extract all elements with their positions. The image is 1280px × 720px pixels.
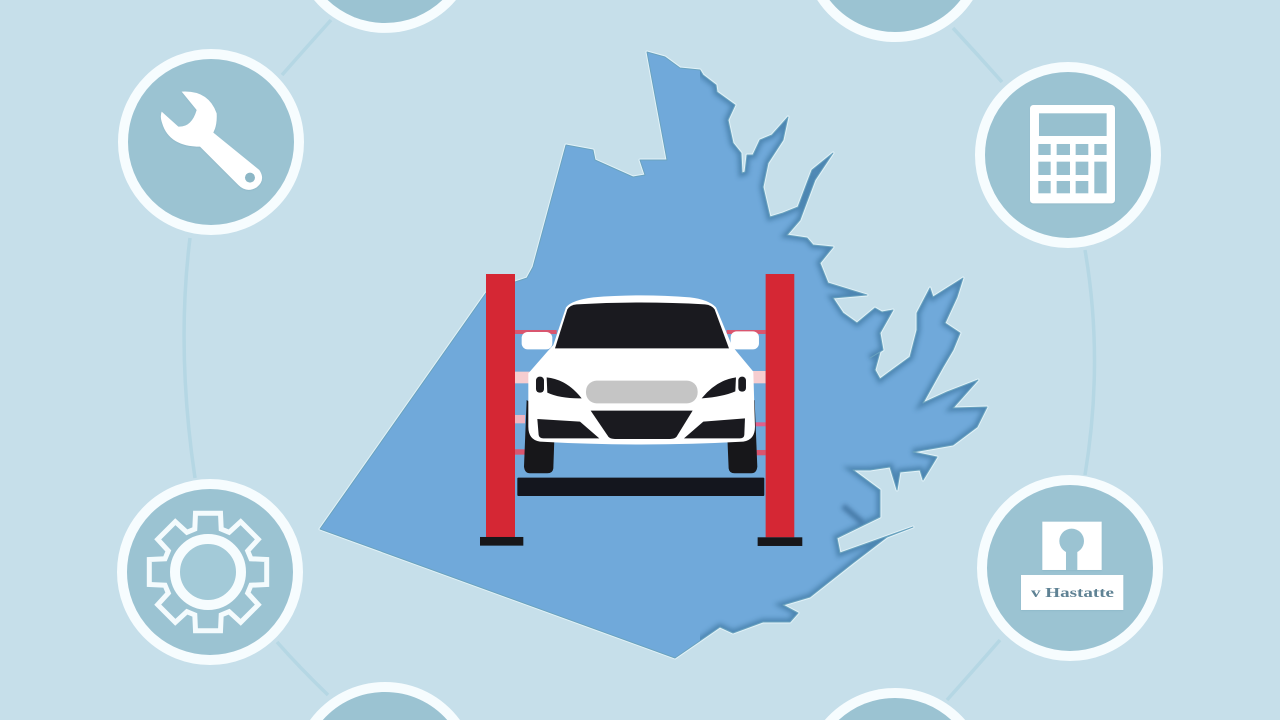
windshield (555, 302, 729, 348)
left mirror (522, 332, 552, 349)
partial circle: top right (817, 0, 973, 42)
right mirror (731, 331, 759, 349)
lift connector rods (515, 330, 766, 455)
badge label: v Hastatte (1031, 586, 1114, 601)
grille (586, 381, 698, 403)
icon: gear circle (122, 484, 298, 660)
lift left post (480, 274, 523, 546)
partial circle: bottom left (310, 682, 460, 720)
right tire (727, 400, 757, 473)
icon: calculator circle (980, 67, 1156, 243)
lift platform (517, 478, 764, 496)
left tire (524, 400, 555, 473)
icon: wrench circle (123, 54, 299, 230)
car on lift (480, 274, 802, 546)
lift right post (758, 274, 802, 546)
partial circle: bottom right (825, 688, 965, 720)
icon: badge circle (982, 480, 1158, 656)
car body (528, 295, 755, 444)
connecting ring segments (184, 20, 1094, 700)
headlights (536, 377, 746, 398)
partial circle: top left (314, 0, 456, 33)
map of region (320, 52, 987, 658)
lower intakes (537, 411, 745, 439)
